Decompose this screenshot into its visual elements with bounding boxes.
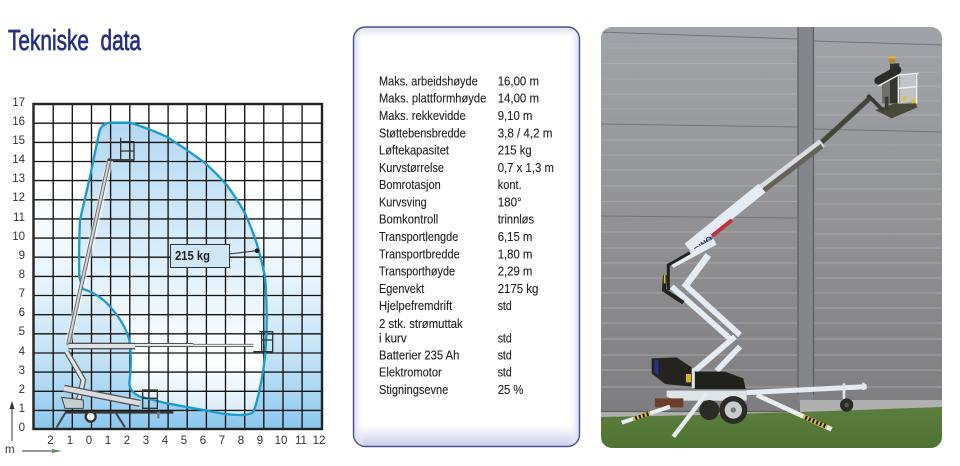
axis labels: reach: 10 bbox=[275, 435, 287, 447]
panel: specifications bbox=[354, 27, 580, 446]
specification values: std bbox=[498, 330, 512, 346]
specification values: 16,00 m bbox=[498, 74, 539, 88]
axis labels: reach: 1 bbox=[67, 435, 73, 447]
axis labels: reach: 1 bbox=[105, 435, 111, 447]
specification labels: Maks. plattformhøyde bbox=[379, 91, 486, 106]
wheels bbox=[699, 396, 853, 424]
specification labels: Elektromotor bbox=[379, 365, 442, 380]
specification labels: Egenvekt bbox=[379, 281, 425, 296]
wall bbox=[601, 27, 942, 422]
callout: 215 kg: 215 kg bbox=[175, 249, 210, 263]
specification values: std bbox=[498, 365, 512, 380]
specification values: 6,15 m bbox=[498, 229, 532, 244]
axis labels: height: 10 bbox=[12, 231, 25, 243]
lift: maker name on boom: DINO bbox=[693, 234, 714, 255]
chart: working range diagram bbox=[5, 97, 325, 456]
axis unit and arrows bbox=[5, 401, 62, 456]
axis labels: reach: 2 bbox=[47, 435, 54, 447]
axis labels: reach: 7 bbox=[219, 435, 225, 447]
specification labels: 2 stk. strømuttak bbox=[379, 316, 463, 331]
specification values: 1,80 m bbox=[498, 246, 532, 262]
specification labels: Transportlengde bbox=[379, 229, 458, 244]
specification labels bbox=[379, 74, 486, 397]
specification values: 2175 kg bbox=[498, 281, 538, 296]
specification labels: Hjelpefremdrift bbox=[379, 298, 453, 313]
axis labels: reach: 3 bbox=[143, 435, 149, 447]
grass bbox=[601, 407, 942, 448]
axis labels: height: 1 bbox=[19, 403, 25, 415]
title: Tekniske data bbox=[8, 25, 142, 57]
axis labels: height: 8 bbox=[19, 269, 25, 281]
axis labels: height: 11 bbox=[13, 212, 25, 224]
specification values: 25 % bbox=[498, 382, 524, 397]
axis labels: height: 5 bbox=[19, 326, 25, 338]
specification labels: Bomrotasjon bbox=[379, 177, 441, 192]
specification values: 14,00 m bbox=[498, 91, 539, 106]
axis labels: height: 3 bbox=[19, 365, 25, 377]
axis labels: height: 4 bbox=[19, 346, 26, 358]
axis labels: reach: 4 bbox=[162, 435, 169, 447]
specification labels: Maks. rekkevidde bbox=[379, 108, 466, 123]
wall panel lines bbox=[601, 32, 942, 387]
specification values: std bbox=[498, 298, 512, 313]
specification values: 2,29 m bbox=[498, 264, 532, 279]
specification values: kont. bbox=[498, 177, 522, 192]
specification values: std bbox=[498, 348, 512, 362]
specification labels: Maks. arbeidshøyde bbox=[379, 74, 478, 88]
outriggers bbox=[622, 393, 832, 437]
axis labels: height: 0 bbox=[19, 422, 25, 434]
grid bbox=[34, 104, 322, 429]
axis labels: reach: 6 bbox=[200, 435, 206, 447]
axis labels: height bbox=[12, 97, 26, 434]
specification labels: Bomkontroll bbox=[379, 212, 438, 226]
specification labels: Kurvstørrelse bbox=[379, 160, 444, 175]
specification labels: Støttebensbredde bbox=[379, 125, 466, 140]
axis labels: height: 14 bbox=[12, 154, 26, 166]
motor housing bbox=[652, 357, 746, 389]
axis labels: height: 16 bbox=[12, 116, 25, 128]
specification values bbox=[498, 74, 554, 397]
axis labels: reach: 11 bbox=[295, 435, 307, 447]
lift: basket with operator bbox=[868, 56, 918, 118]
specification labels: Batterier 235 Ah bbox=[379, 348, 459, 362]
axis labels: height: 15 bbox=[12, 135, 25, 147]
axis labels: height: 7 bbox=[19, 288, 25, 300]
axis unit and arrows: m bbox=[5, 444, 15, 456]
specification values: 3,8 / 4,2 m bbox=[498, 125, 552, 140]
axis labels: height: 17 bbox=[12, 97, 25, 109]
axis labels: reach: 12 bbox=[313, 435, 325, 447]
specification labels: Løftekapasitet bbox=[379, 142, 449, 158]
lift: folded arm, chassis and wheel bbox=[57, 352, 173, 427]
specification values: 9,10 m bbox=[498, 108, 532, 123]
lift: folding arms, motor, chassis and wheels bbox=[622, 242, 867, 437]
specification labels: Stigningsevne bbox=[379, 382, 448, 397]
lift: horizontal boom with basket bbox=[68, 332, 273, 352]
axis labels: height: 2 bbox=[19, 384, 25, 396]
callout: 215 kg bbox=[170, 244, 259, 268]
specification labels: Kurvsving bbox=[379, 194, 427, 209]
axis labels: reach: 9 bbox=[257, 435, 263, 447]
axis labels: height: 12 bbox=[12, 192, 25, 204]
panel card bbox=[354, 27, 580, 446]
axis labels: reach bbox=[47, 435, 325, 447]
reach envelope outline bbox=[79, 123, 267, 415]
chart background bbox=[34, 104, 322, 429]
specification labels: Transportbredde bbox=[379, 246, 460, 262]
pavement bbox=[601, 400, 942, 417]
axis labels: height: 13 bbox=[12, 173, 25, 185]
chart frame bbox=[34, 104, 322, 429]
specification values: 180° bbox=[498, 194, 522, 209]
axis labels: reach: 2 bbox=[124, 435, 130, 447]
white halo around raised boom bbox=[68, 160, 110, 343]
folding arms bbox=[664, 242, 740, 371]
axis labels: height: 6 bbox=[19, 307, 25, 319]
lift: raised boom with basket bbox=[68, 138, 134, 343]
wall column bbox=[798, 27, 814, 402]
photo: lift in front of grey wall bbox=[601, 27, 942, 448]
specification values: trinnløs bbox=[498, 212, 534, 226]
reach envelope fill bbox=[79, 123, 267, 415]
specification labels: i kurv bbox=[379, 330, 407, 346]
axis labels: height: 9 bbox=[19, 250, 25, 262]
lift: telescopic boom bbox=[688, 98, 870, 248]
axis labels: reach: 0 bbox=[86, 435, 92, 447]
specification labels: Transporthøyde bbox=[379, 264, 455, 279]
specification values: 215 kg bbox=[498, 142, 532, 158]
chassis and tow bar bbox=[655, 383, 867, 407]
axis labels: reach: 5 bbox=[181, 435, 187, 447]
specification values: 0,7 x 1,3 m bbox=[498, 160, 554, 175]
axis labels: reach: 8 bbox=[238, 435, 244, 447]
